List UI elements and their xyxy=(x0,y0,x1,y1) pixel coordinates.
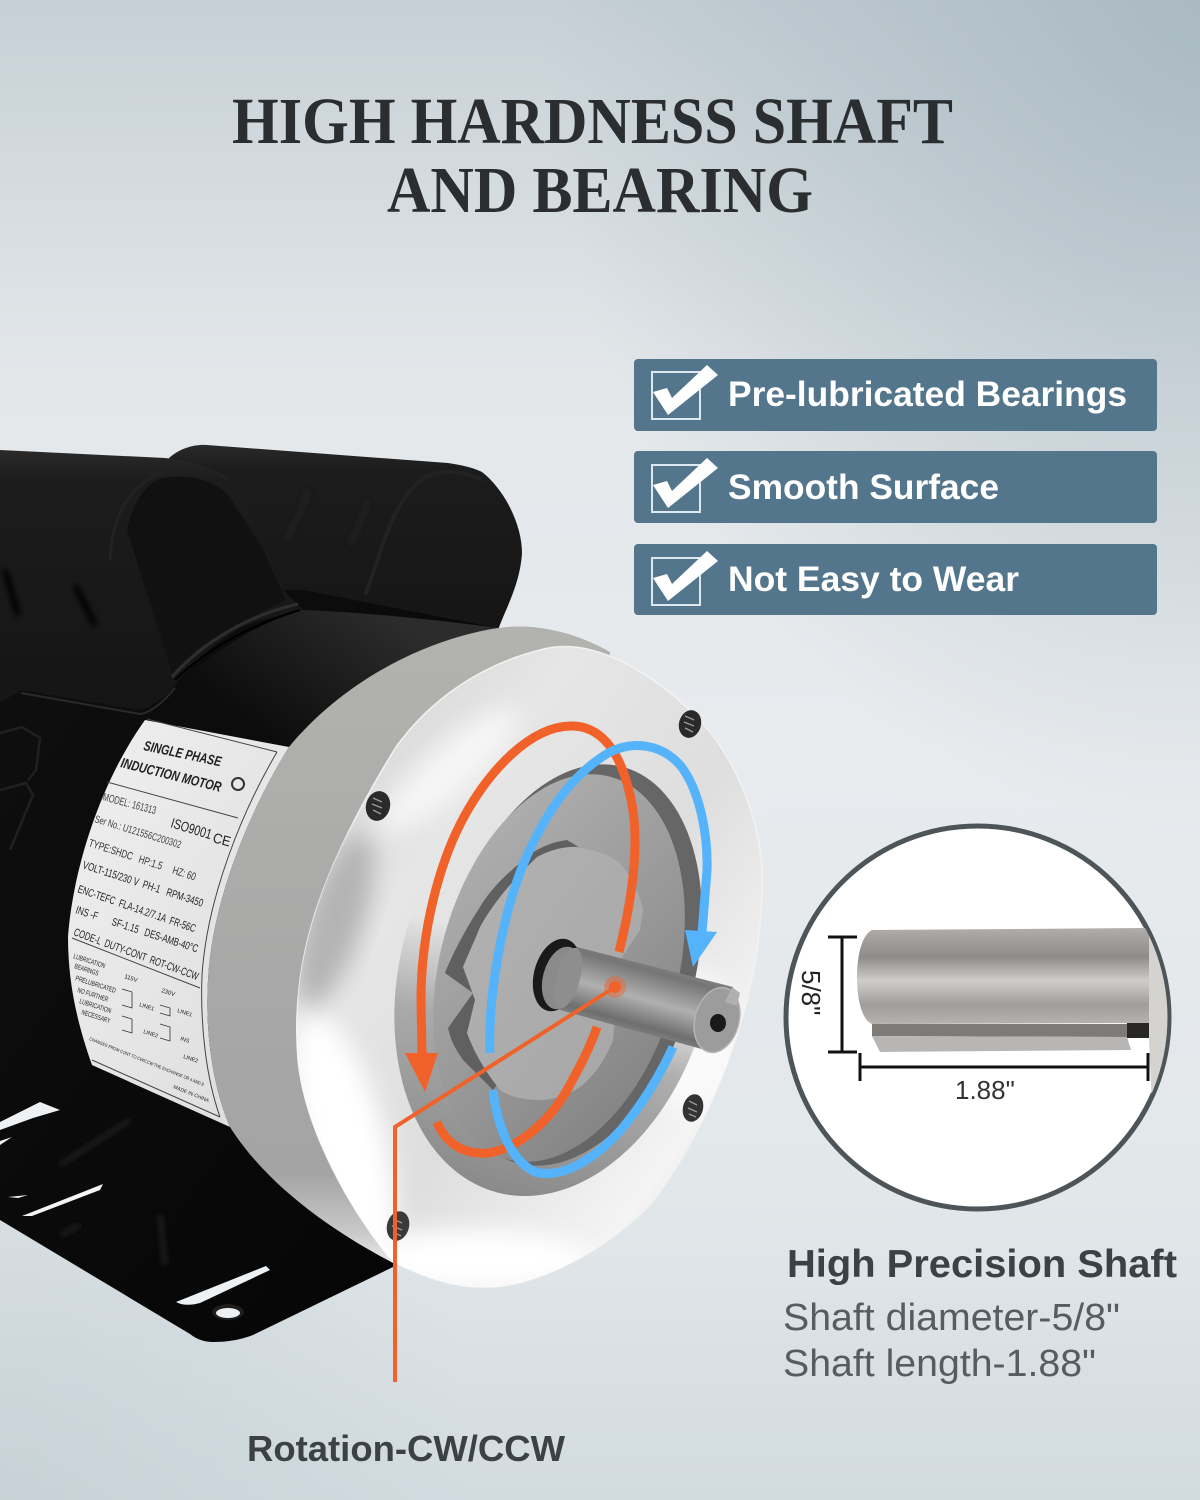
shaft specification text: High Precision Shaft xyxy=(787,1243,1177,1286)
feature badge: pre-lubricated bearings xyxy=(634,359,1157,431)
callout label: rotation: Rotation-CW/CCW xyxy=(247,1428,565,1469)
callout line: rotation xyxy=(395,976,626,1382)
feature badge: smooth surface: Smooth Surface xyxy=(728,468,999,507)
shaft specification text: Shaft length-1.88" xyxy=(783,1343,1096,1385)
motor nameplate: ISO9001 xyxy=(169,815,214,842)
title: HIGH HARDNESS SHAFT xyxy=(232,85,953,158)
motor nameplate: MODEL: 161313 xyxy=(101,791,157,817)
bearing inner disc xyxy=(445,840,643,1100)
motor nameplate: TYPE:SHDC HP:1.5 HZ: 60 xyxy=(87,837,197,883)
motor nameplate: VOLT-115/230 V PH-1 RPM-3450 xyxy=(81,859,205,910)
motor main housing and base plate xyxy=(0,590,560,1342)
motor nameplate: LINE1 xyxy=(138,1002,155,1013)
shaft dimensions inset xyxy=(786,826,1180,1209)
motor nameplate: LINE1 xyxy=(176,1008,193,1019)
inset: shaft xyxy=(857,928,1149,1024)
feature badge: not easy to wear: Not Easy to Wear xyxy=(728,560,1019,599)
bearing housing recess xyxy=(393,735,744,1195)
motor output shaft xyxy=(525,933,747,1058)
motor nameplate: LUBRICATION xyxy=(78,998,112,1015)
title xyxy=(232,85,953,227)
inset: diameter dimension xyxy=(796,937,857,1052)
motor nameplate: NO FURTHER xyxy=(76,987,109,1004)
inset: length dimension: 1.88" xyxy=(955,1075,1015,1105)
flange side wall xyxy=(207,627,610,1263)
motor nameplate: ENC-TEFC FLA-14.2/7.1A FR-56C xyxy=(76,883,197,935)
motor nameplate: LINE2 xyxy=(142,1029,159,1040)
inset: diameter dimension: 5/8" xyxy=(796,970,826,1015)
shaft specification text xyxy=(783,1243,1177,1385)
motor illustration xyxy=(0,445,763,1342)
motor nameplate: LINE2 xyxy=(182,1054,199,1065)
motor nameplate: INS -F SF-1.15 DES-AMB-40°C xyxy=(74,904,200,955)
motor nameplate: SINGLE PHASE xyxy=(142,737,223,769)
title: AND BEARING xyxy=(387,154,813,227)
feature badge: not easy to wear xyxy=(634,544,1157,615)
rotation arrow: counter-clockwise orange xyxy=(405,726,635,1153)
inset: housing edge xyxy=(1149,936,1168,1094)
motor nameplate: LUBRICATION xyxy=(72,953,106,970)
motor nameplate xyxy=(68,719,289,1127)
flange screw holes xyxy=(363,708,706,1243)
motor nameplate: Ser No.: U121556C200302 xyxy=(93,813,183,851)
motor nameplate: PRELUBRICATED xyxy=(74,975,116,995)
motor nameplate: 115V xyxy=(123,974,138,984)
motor front capacitor hump xyxy=(0,450,303,714)
motor nameplate: BEARINGS xyxy=(73,963,100,978)
motor nameplate: MADE IN CHINA xyxy=(172,1084,210,1104)
motor nameplate: CHANGES FROM CONT TO CW/CCW THE EXCHANGE OR 4 AND 8 xyxy=(89,1036,205,1087)
inset: keyway xyxy=(872,1023,1149,1052)
motor rear capacitor hump xyxy=(169,445,522,640)
feature badge: smooth surface xyxy=(634,451,1157,523)
motor nameplate: INDUCTION MOTOR xyxy=(119,754,224,795)
rotation arrow: clockwise blue xyxy=(490,746,717,1174)
motor nameplate: 230V xyxy=(160,988,176,998)
inset: length dimension xyxy=(860,1053,1148,1105)
motor nameplate: CODE-L DUTY-CONT ROT-CW-CCW xyxy=(72,927,201,983)
motor nameplate: INS xyxy=(179,1036,190,1045)
shaft specification text: Shaft diameter-5/8" xyxy=(783,1297,1120,1339)
flange front face xyxy=(273,646,762,1290)
motor nameplate: CE xyxy=(211,829,233,850)
feature badge: pre-lubricated bearings: Pre-lubricated Bearings xyxy=(728,375,1127,414)
bevelled ring xyxy=(347,718,763,1232)
motor nameplate: NECESSARY xyxy=(80,1009,111,1025)
